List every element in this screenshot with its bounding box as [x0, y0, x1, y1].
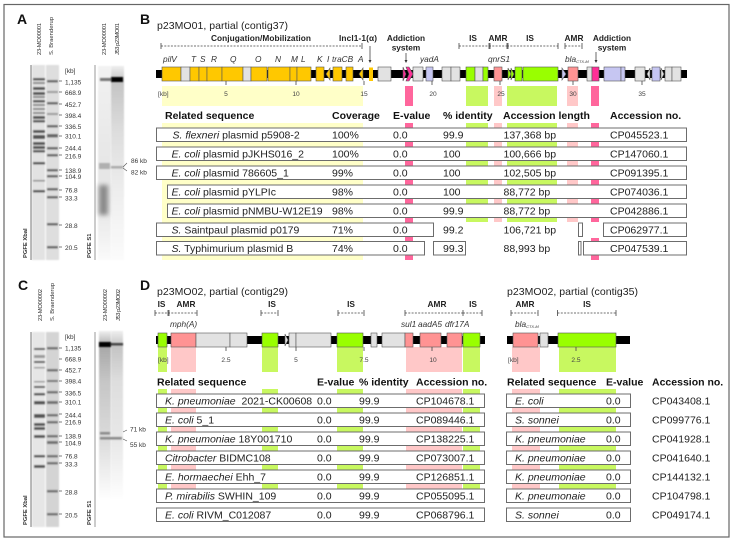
gene names B: I	[327, 54, 330, 64]
table row: S. Typhimurium B	[156, 242, 686, 255]
ladder sizes C: 336.5	[65, 390, 82, 398]
scale B: 5	[224, 91, 228, 98]
panel letter B: B	[140, 11, 150, 27]
table row: S. flexneri: 137,368 bp	[504, 130, 556, 142]
S1 lane labels C: 23-MO00002	[103, 289, 109, 321]
ladder sizes C: 28.8	[65, 490, 78, 496]
table header contig35: Accession no.	[652, 376, 723, 388]
region brackets contig29: IS	[158, 299, 166, 309]
S1 axis line and label A: PGFE S1	[87, 233, 93, 258]
table row: E. coli pYLPIc: E. coli plasmid pYLPIc	[172, 186, 276, 198]
row: Citrobacter BIDMC108: Citrobacter BIDMC108	[165, 452, 271, 464]
S1 axis line and label C: PGFE S1	[87, 500, 93, 525]
row: S. sonnei CP049174.1: 0.0	[606, 510, 621, 522]
row: K. pneumoniae CP144132.1	[506, 470, 711, 484]
row: E. coli RIVM_C012087: CP068796.1	[416, 510, 475, 522]
table row: E. coli pYLPIc: 100	[443, 186, 461, 198]
ladder sizes C: 1,135	[65, 346, 82, 352]
plasmid map contig35	[507, 333, 630, 347]
heading D contig35: p23MO02, partial (contig35)	[507, 286, 638, 298]
ladder sizes A: 33.3	[65, 196, 78, 202]
gene names B: R	[211, 54, 217, 64]
scale B: 15	[360, 91, 368, 98]
row: K. pneumoniae CP041928.1: CP041928.1	[652, 434, 711, 446]
row: S. sonnei CP049174.1	[506, 508, 711, 522]
lane labels C: 23-MO00002	[38, 289, 44, 321]
region brackets contig29: IS	[347, 299, 355, 309]
table header B: E-value	[393, 110, 431, 122]
gene names B: Q	[230, 54, 237, 64]
table row: S. Saintpaul p0179: 71%	[332, 224, 353, 236]
gene names B: A	[357, 54, 364, 64]
row: K. pneumoniae 18Y001710: 99.9	[359, 434, 380, 446]
table row: E. coli pJKHS016_2: E. coli plasmid pJKHS016_2	[172, 148, 304, 160]
table row: S. flexneri: 100%	[332, 130, 359, 142]
region brackets B: IS	[526, 33, 534, 43]
table row: E. coli pYLPIc	[168, 185, 686, 198]
table row: S. Typhimurium B: S. Typhimurium plasmid B	[172, 243, 293, 255]
table header contig35: E-value	[606, 376, 644, 388]
table row: S. Saintpaul p0179: 99.2	[443, 224, 464, 236]
scale contig29: 7.5	[359, 357, 369, 364]
row: K. pneumonaie CP104798.1: K. pneumonaie	[515, 490, 586, 502]
ladder sizes C	[59, 334, 82, 520]
table header contig29: Accession no.	[416, 376, 487, 388]
homology shading contig35	[512, 347, 616, 489]
table header contig29	[157, 376, 487, 388]
scale B: 20	[429, 91, 437, 98]
ladder sizes A: 20.5	[65, 245, 78, 252]
row: K. pneumonaie CP104798.1: CP104798.1	[652, 490, 711, 502]
scale contig29: 2.5	[221, 357, 231, 364]
table row: E. coli pJKHS016_2: 100	[443, 148, 461, 160]
gene names B: T	[191, 54, 197, 64]
region brackets B: Addiction	[593, 33, 631, 43]
lane labels A: 23-MO00001	[37, 23, 43, 55]
row: P. mirabilis SWHIN_109: 0.0	[317, 490, 332, 502]
table row: S. Typhimurium B: 88,993 bp	[504, 243, 550, 255]
scale contig29: [kb]	[158, 357, 169, 364]
XbaI axis line and label A: PGFE XbaI	[23, 228, 29, 258]
row: P. mirabilis SWHIN_109	[156, 489, 484, 502]
row: K. pneumoniae 18Y001710: CP138225.1	[416, 434, 475, 446]
gene names B	[162, 54, 589, 64]
row: E. coli 5_1: CP089446.1	[416, 414, 475, 426]
scale B: [kb]	[158, 91, 169, 98]
row: E. hormaechei Ehh_7: E. hormaechei Ehh_7	[165, 472, 266, 484]
row: E. coli 5_1	[156, 413, 484, 426]
S1 lane labels A	[102, 23, 121, 55]
ladder sizes C: 104.9	[65, 440, 82, 448]
ladder sizes C: 452.7	[65, 368, 82, 374]
row: E. coli RIVM_C012087	[156, 508, 484, 522]
ladder sizes A: 668.9	[65, 90, 82, 97]
row: K. pneumoniae 2021-CK00608: 0.0	[317, 396, 332, 408]
gene names B: traCB	[332, 54, 354, 64]
row: Citrobacter BIDMC108	[156, 451, 484, 464]
ladder sizes A: [kb]	[65, 68, 76, 75]
table row: E. coli pJKHS016_2: 100%	[332, 148, 359, 160]
table row: E. coli 786605_1: 0.0	[393, 168, 408, 180]
XbaI gel lanes A	[32, 65, 59, 260]
row: K. pneumoniae CP041928.1: K. pneumoniae	[515, 434, 586, 446]
S1 lane labels A: J53 p23MO01	[115, 23, 121, 55]
row: E. hormaechei Ehh_7: 99.9	[359, 472, 380, 484]
scale contig35	[508, 347, 581, 364]
ladder sizes A: 28.8	[65, 223, 78, 230]
row: E. hormaechei Ehh_7: 0.0	[317, 472, 332, 484]
row: S. sonnei CP099776.1: 0.0	[606, 414, 621, 426]
lane labels C	[38, 283, 56, 321]
row: K. pneumoniae 2021-CK00608: CP104678.1	[416, 396, 475, 408]
panel C: PFGE S1 gel	[87, 289, 146, 527]
row: K. pneumonaie CP104798.1: 0.0	[606, 490, 621, 502]
region brackets contig29: AMR	[428, 299, 446, 309]
table row: S. Typhimurium B: CP047539.1	[610, 243, 669, 255]
ladder sizes A: 104.9	[65, 174, 82, 181]
gene names contig29: dfr17A	[445, 319, 470, 329]
table row: E. coli pYLPIc: 88,772 bp	[504, 186, 550, 198]
S1 size labels C: 71 kb	[130, 426, 146, 434]
region brackets B: system	[598, 42, 626, 52]
region brackets B: Incl1-1(α)	[339, 33, 377, 43]
table header contig29: % identity	[359, 376, 409, 388]
table header contig35: Related sequence	[507, 376, 596, 388]
ladder sizes A: 76.8	[65, 188, 78, 194]
row: E. hormaechei Ehh_7	[156, 470, 484, 484]
row: P. mirabilis SWHIN_109: 99.9	[359, 490, 380, 502]
plasmid map contig29	[156, 333, 485, 347]
row: S. sonnei CP099776.1: S. sonnei	[515, 414, 559, 426]
panel D: p23MO02 contig35 map and table	[506, 286, 723, 522]
S1 size labels C	[123, 426, 146, 449]
table row: E. coli pJKHS016_2: 100,666 bp	[504, 148, 556, 160]
row: K. pneumoniae CP041640.1	[506, 451, 711, 464]
table header contig29: Related sequence	[157, 376, 246, 388]
row: P. mirabilis SWHIN_109: P. mirabilis SWHIN_109	[165, 490, 276, 502]
region brackets B	[161, 33, 631, 52]
lane labels A	[37, 17, 55, 55]
scale contig29: 5	[294, 357, 298, 364]
homology shading B	[162, 86, 599, 260]
scale contig35: 2.5	[571, 357, 581, 364]
gene names B: CTX-M	[576, 59, 589, 64]
row: E. coli RIVM_C012087: 99.9	[359, 510, 380, 522]
gene names B: S	[200, 54, 206, 64]
gene names contig29: sul1	[401, 319, 416, 329]
table row: S. flexneri: 99.9	[443, 130, 464, 142]
row: E. coli CP043408.1	[506, 394, 711, 408]
row: E. hormaechei Ehh_7: CP126851.1	[416, 472, 475, 484]
S1 gel lanes A	[98, 66, 124, 260]
region brackets B: IS	[469, 33, 477, 43]
table row: E. coli pYLPIc: CP074036.1	[610, 186, 669, 198]
row: E. coli 5_1: 0.0	[317, 414, 332, 426]
table row: E. coli pYLPIc: 0.0	[393, 186, 408, 198]
ladder sizes C: 216.9	[65, 420, 82, 426]
table row: E. coli pNMBU-W12E19	[168, 204, 686, 218]
panel letter C: C	[18, 277, 28, 293]
table header B: Accession length	[503, 110, 590, 122]
row: K. pneumoniae CP041928.1	[506, 432, 711, 446]
table row: E. coli pNMBU-W12E19: E. coli plasmid pNMBU-W12E19	[172, 206, 323, 218]
panel A: PFGE S1 gel	[87, 23, 147, 260]
table row: E. coli pJKHS016_2: 0.0	[393, 148, 408, 160]
scale contig29: 10	[429, 357, 437, 364]
S1 size labels C: 55 kb	[130, 442, 146, 449]
table header B: Related sequence	[165, 110, 254, 122]
scale B: 25	[497, 91, 505, 98]
panel letter A: A	[17, 11, 27, 27]
table row: S. Saintpaul p0179: 0.0	[393, 224, 408, 236]
row: K. pneumonaie CP104798.1	[506, 489, 711, 502]
row: K. pneumoniae 2021-CK00608: 99.9	[359, 396, 380, 408]
panel letter D: D	[140, 277, 150, 293]
region brackets B: Addiction	[387, 33, 425, 43]
scale contig35: [kb]	[508, 357, 519, 364]
row: E. coli RIVM_C012087: 0.0	[317, 510, 332, 522]
row: S. sonnei CP049174.1: CP049174.1	[652, 510, 711, 522]
region brackets B: AMR	[489, 33, 507, 43]
panel B: p23MO01 map and table	[140, 11, 687, 260]
scale B: 30	[569, 91, 577, 98]
region brackets B: system	[392, 42, 420, 52]
table row: E. coli pJKHS016_2	[156, 147, 686, 160]
table row: E. coli pNMBU-W12E19: 88,772 bp	[504, 206, 550, 218]
row: S. sonnei CP049174.1: S. sonnei	[515, 510, 559, 522]
heading B: p23MO01, partial (contig37)	[157, 20, 288, 32]
row: K. pneumoniae CP144132.1: K. pneumoniae	[515, 472, 586, 484]
row: K. pneumoniae 2021-CK00608	[156, 394, 484, 408]
S1 lane labels C: J53 p23MO02	[116, 289, 122, 321]
table row: S. Saintpaul p0179: 106,721 bp	[504, 224, 556, 236]
scale B	[158, 81, 646, 98]
table row: E. coli 786605_1	[156, 166, 686, 180]
table row: S. Saintpaul p0179: S. Saintpaul plasmid p0179	[172, 224, 299, 236]
table row: S. Saintpaul p0179	[156, 223, 686, 236]
row: K. pneumoniae 2021-CK00608: K. pneumoniae	[165, 396, 236, 408]
scale B: 10	[292, 91, 300, 98]
table header B: % identity	[443, 110, 493, 122]
table row: E. coli 786605_1: CP091395.1	[610, 168, 669, 180]
table row: E. coli 786605_1: E. coli plasmid 786605_1	[172, 168, 289, 180]
ladder sizes C: 310.1	[65, 400, 82, 406]
scale contig29	[158, 347, 437, 364]
table row: S. Typhimurium B: 0.0	[393, 243, 408, 255]
row: K. pneumoniae CP041640.1: 0.0	[606, 452, 621, 464]
ladder sizes A: 310.1	[65, 134, 82, 140]
table row: S. flexneri: 0.0	[393, 130, 408, 142]
ladder sizes A: 138.9	[65, 168, 82, 175]
table row: E. coli pJKHS016_2: CP147060.1	[610, 148, 669, 160]
row: K. pneumoniae 18Y001710: 0.0	[317, 434, 332, 446]
panel C: PFGE XbaI gel	[18, 277, 82, 527]
table row: S. flexneri: CP045523.1	[610, 130, 669, 142]
S1 size labels A: 86 kb	[131, 158, 147, 165]
gene names B: yadA	[419, 54, 439, 64]
row: E. coli CP043408.1: CP043408.1	[652, 396, 711, 408]
gene names B: bla	[565, 54, 576, 64]
lane labels A: S. Braenderup	[49, 17, 55, 55]
region brackets contig29: IS	[469, 299, 477, 309]
row: Citrobacter BIDMC108: 99.9	[359, 452, 380, 464]
S1 gel lanes C	[99, 331, 123, 501]
S1 size labels A: 82 kb	[131, 170, 147, 176]
table header B	[165, 110, 681, 122]
S1 lane labels A: 23-MO00001	[102, 23, 108, 55]
ladder sizes C: 20.5	[65, 512, 78, 520]
gene name bla contig35: bla	[515, 319, 526, 329]
table row: S. Typhimurium B: 99.3	[443, 243, 464, 255]
panel A: PFGE XbaI gel	[17, 11, 82, 260]
gene names contig29	[170, 319, 470, 329]
table row: E. coli 786605_1: 100	[443, 168, 461, 180]
row: K. pneumoniae 18Y001710: K. pneumoniae 18Y001710	[165, 434, 292, 446]
table row: S. Typhimurium B: 74%	[332, 243, 353, 255]
region brackets B: Conjugation/Mobilization	[211, 33, 311, 43]
table row: E. coli 786605_1: 102,505 bp	[504, 168, 556, 180]
table header contig35	[507, 376, 723, 388]
gene names B: L	[301, 54, 306, 64]
row: E. coli 5_1: E. coli 5_1	[165, 414, 214, 426]
region brackets contig35: AMR	[516, 299, 534, 309]
ladder sizes C: 668.9	[65, 356, 82, 364]
table row: E. coli pYLPIc: 98%	[332, 186, 353, 198]
S1 size labels A	[123, 158, 147, 176]
table row: E. coli pNMBU-W12E19: CP042886.1	[610, 206, 669, 218]
region brackets contig35: IS	[583, 299, 591, 309]
gene names B: qnrS1	[488, 54, 510, 64]
region brackets contig29: AMR	[177, 299, 195, 309]
row: E. coli RIVM_C012087: E. coli RIVM_C012087	[165, 510, 271, 522]
XbaI axis line and label C: PGFE XbaI	[23, 495, 29, 525]
table row: E. coli pNMBU-W12E19: 98%	[332, 206, 353, 218]
table header B: Coverage	[332, 110, 380, 122]
ladder sizes A	[59, 68, 82, 252]
ladder sizes A: 244.4	[65, 146, 82, 152]
region brackets contig35	[511, 299, 616, 316]
scale B: 35	[638, 91, 646, 98]
region brackets contig29	[155, 299, 482, 316]
row: S. sonnei CP099776.1: CP099776.1	[652, 414, 711, 426]
row: E. coli 5_1: 99.9	[359, 414, 380, 426]
gene names B: K	[317, 54, 323, 64]
row: K. pneumoniae CP041928.1: 0.0	[606, 434, 621, 446]
table row: E. coli pNMBU-W12E19: 0.0	[393, 206, 408, 218]
gene names B: N	[275, 54, 281, 64]
lane labels C: S. Braenderup	[50, 283, 56, 321]
heading D contig29: p23MO02, partial (contig29)	[157, 286, 288, 298]
row: K. pneumoniae CP144132.1: 0.0	[606, 472, 621, 484]
panel D: p23MO02 contig29 map and table	[140, 277, 487, 522]
S1 lane labels C	[103, 289, 122, 321]
region brackets contig29: IS	[268, 299, 276, 309]
row: K. pneumoniae 2021-CK00608: 2021-CK00608	[242, 396, 312, 408]
region brackets B: AMR	[565, 33, 583, 43]
gene name bla contig35: CTX-M	[526, 324, 539, 329]
ladder sizes C: 398.4	[65, 378, 82, 386]
row: K. pneumoniae 18Y001710	[156, 432, 484, 446]
ladder sizes A: 398.4	[65, 113, 82, 120]
row: Citrobacter BIDMC108: 0.0	[317, 452, 332, 464]
homology shading contig29	[158, 347, 480, 489]
row: Citrobacter BIDMC108: CP073007.1	[416, 452, 475, 464]
table row: S. flexneri: S. flexneri plasmid p5908-2	[172, 130, 300, 142]
ladder sizes A: 336.5	[65, 124, 82, 131]
gene names B: pilV	[162, 54, 178, 64]
plasmid map B	[156, 67, 687, 81]
ladder sizes A: 452.7	[65, 102, 82, 109]
ladder sizes A: 1,135	[65, 80, 82, 86]
row: K. pneumoniae CP041640.1: CP041640.1	[652, 452, 711, 464]
ladder sizes C: 33.3	[65, 462, 78, 468]
ladder sizes C: 138.9	[65, 434, 82, 440]
row: E. coli CP043408.1: 0.0	[606, 396, 621, 408]
ladder sizes C: 244.4	[65, 412, 82, 420]
row: E. coli CP043408.1: E. coli	[515, 396, 544, 408]
ladder sizes C: 76.8	[65, 454, 78, 460]
gene names contig29: aadA5	[418, 319, 442, 329]
table header B: Accession no.	[610, 110, 681, 122]
gene names contig29: mph(A)	[170, 319, 197, 329]
table row: E. coli 786605_1: 99%	[332, 168, 353, 180]
table header contig29: E-value	[317, 376, 355, 388]
row: K. pneumoniae CP041640.1: K. pneumoniae	[515, 452, 586, 464]
table row: S. flexneri	[156, 128, 686, 142]
ladder sizes C: [kb]	[65, 334, 76, 341]
table row: S. Saintpaul p0179: CP062977.1	[610, 224, 669, 236]
row: P. mirabilis SWHIN_109: CP055095.1	[416, 490, 475, 502]
gene names B: M	[291, 54, 298, 64]
row: S. sonnei CP099776.1	[506, 413, 711, 426]
ladder sizes A: 216.9	[65, 154, 82, 160]
row: K. pneumoniae CP144132.1: CP144132.1	[652, 472, 711, 484]
XbaI gel lanes C	[32, 332, 59, 527]
gene names B: O	[255, 54, 262, 64]
table row: E. coli pNMBU-W12E19: 99.9	[443, 206, 464, 218]
arrows B	[368, 46, 598, 63]
